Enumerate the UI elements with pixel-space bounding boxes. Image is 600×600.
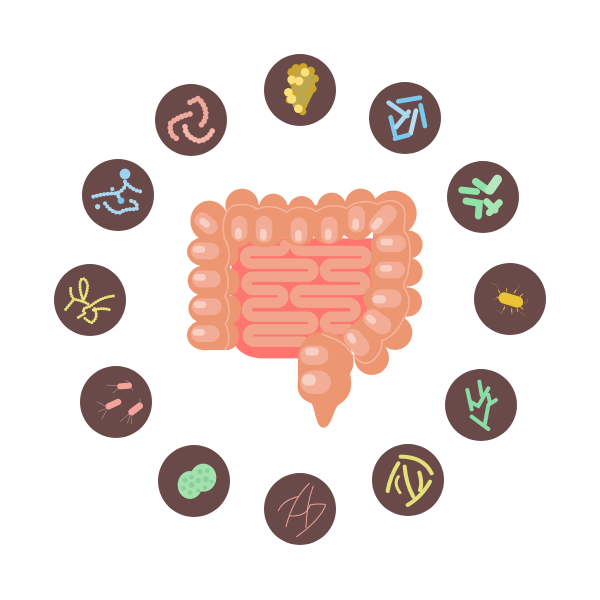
circle: yellow curved rods	[372, 444, 444, 516]
circle: green branched rods	[445, 369, 517, 441]
mesentery background	[232, 238, 378, 358]
circle: thin pink filaments	[264, 473, 336, 545]
circle: blue rods	[369, 82, 441, 154]
circle: yellow flagellated bacillus	[474, 263, 546, 335]
circle: green coccus pair	[158, 445, 230, 517]
colon contour line	[223, 201, 410, 363]
rectum	[298, 332, 353, 428]
pill highlights	[192, 216, 393, 386]
circle: yellow streptococcus chains	[54, 264, 126, 336]
circle: green branching bacteria	[447, 161, 519, 233]
circle: pink beaded chain	[155, 84, 227, 156]
haustra pills	[191, 201, 406, 394]
intestines	[187, 189, 423, 428]
small intestine	[245, 245, 367, 342]
circle: blue chained cocci	[82, 159, 154, 231]
large intestine body	[187, 189, 423, 428]
circle: pink flagellated bacilli	[80, 366, 152, 438]
circle: yellow cocci cluster	[264, 54, 336, 126]
